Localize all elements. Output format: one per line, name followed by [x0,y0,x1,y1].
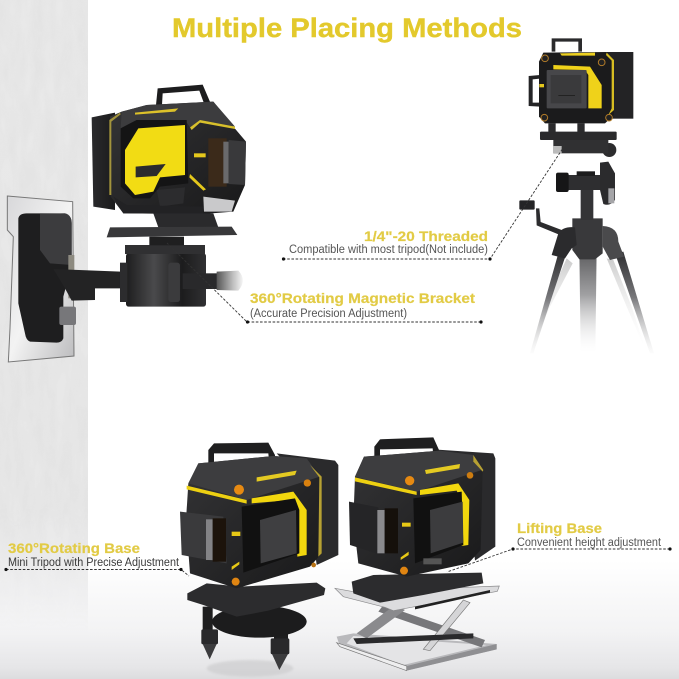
icon: tripod hub [552,190,624,260]
callout: 360 rotating base: Mini Tripod with Precise Adjustment [8,557,180,569]
icon: bracket arm [53,269,121,301]
wall-mounted laser with magnetic bracket [7,85,246,362]
callout: 1/4"-20 threaded: 1/4"-20 Threaded [364,228,488,244]
callout: 1/4"-20 threaded [282,145,565,261]
laser on mini tripod base [180,443,338,677]
icon: round base [212,606,307,638]
icon: magnetic mount block [18,213,72,343]
icon: laser body [180,456,322,588]
callout: 360 rotating magnetic bracket [167,243,483,324]
icon: carry handle [374,437,439,458]
icon: steel wall plate [7,196,74,362]
icon: rotating cylinder base [120,237,206,307]
icon: laser body [349,451,483,577]
icon: laser battery [92,113,115,210]
icon: base plate [352,573,483,603]
callout: lifting base: Convenient height adjustment [517,537,662,549]
icon: laser feet and plate [107,213,237,237]
icon: battery [277,453,338,565]
callout: lifting base [447,520,672,572]
icon: laser body [539,52,614,123]
icon: tripod crank handle [519,200,562,235]
icon: carry handle [208,443,275,463]
callout: 360 rotating base [4,540,189,576]
laser on scissor lifting base [335,437,499,671]
wall [0,0,88,640]
title: Multiple Placing Methods [172,13,522,43]
icon: quick release plate [540,123,617,153]
yellow side panel [125,125,185,195]
icon: tripod pan head [556,143,616,205]
floor background [0,560,679,679]
icon: spike legs [201,607,289,670]
icon: laser body [109,102,246,214]
icon: scissor lift [335,586,499,671]
icon: tripod legs [530,247,654,353]
icon: laser carry handle [156,85,211,105]
icon: battery [433,449,495,561]
icon: base plate [187,583,325,617]
callout: 360 rotating magnetic bracket: 360°Rotating Magnetic Bracket [250,290,475,306]
icon: locking lever and knob [183,271,243,291]
callout: 1/4"-20 threaded: Compatible with most tripod(Not include) [289,244,488,256]
icon: laser handles [529,38,582,107]
tripod-mounted laser [519,38,654,353]
callout: lifting base: Lifting Base [517,520,602,536]
callout: 360 rotating base: 360°Rotating Base [8,540,140,556]
callout: 360 rotating magnetic bracket: (Accurate Precision Adjustment) [250,308,407,320]
icon: laser battery [607,52,633,119]
icon: base reflection [207,660,293,677]
